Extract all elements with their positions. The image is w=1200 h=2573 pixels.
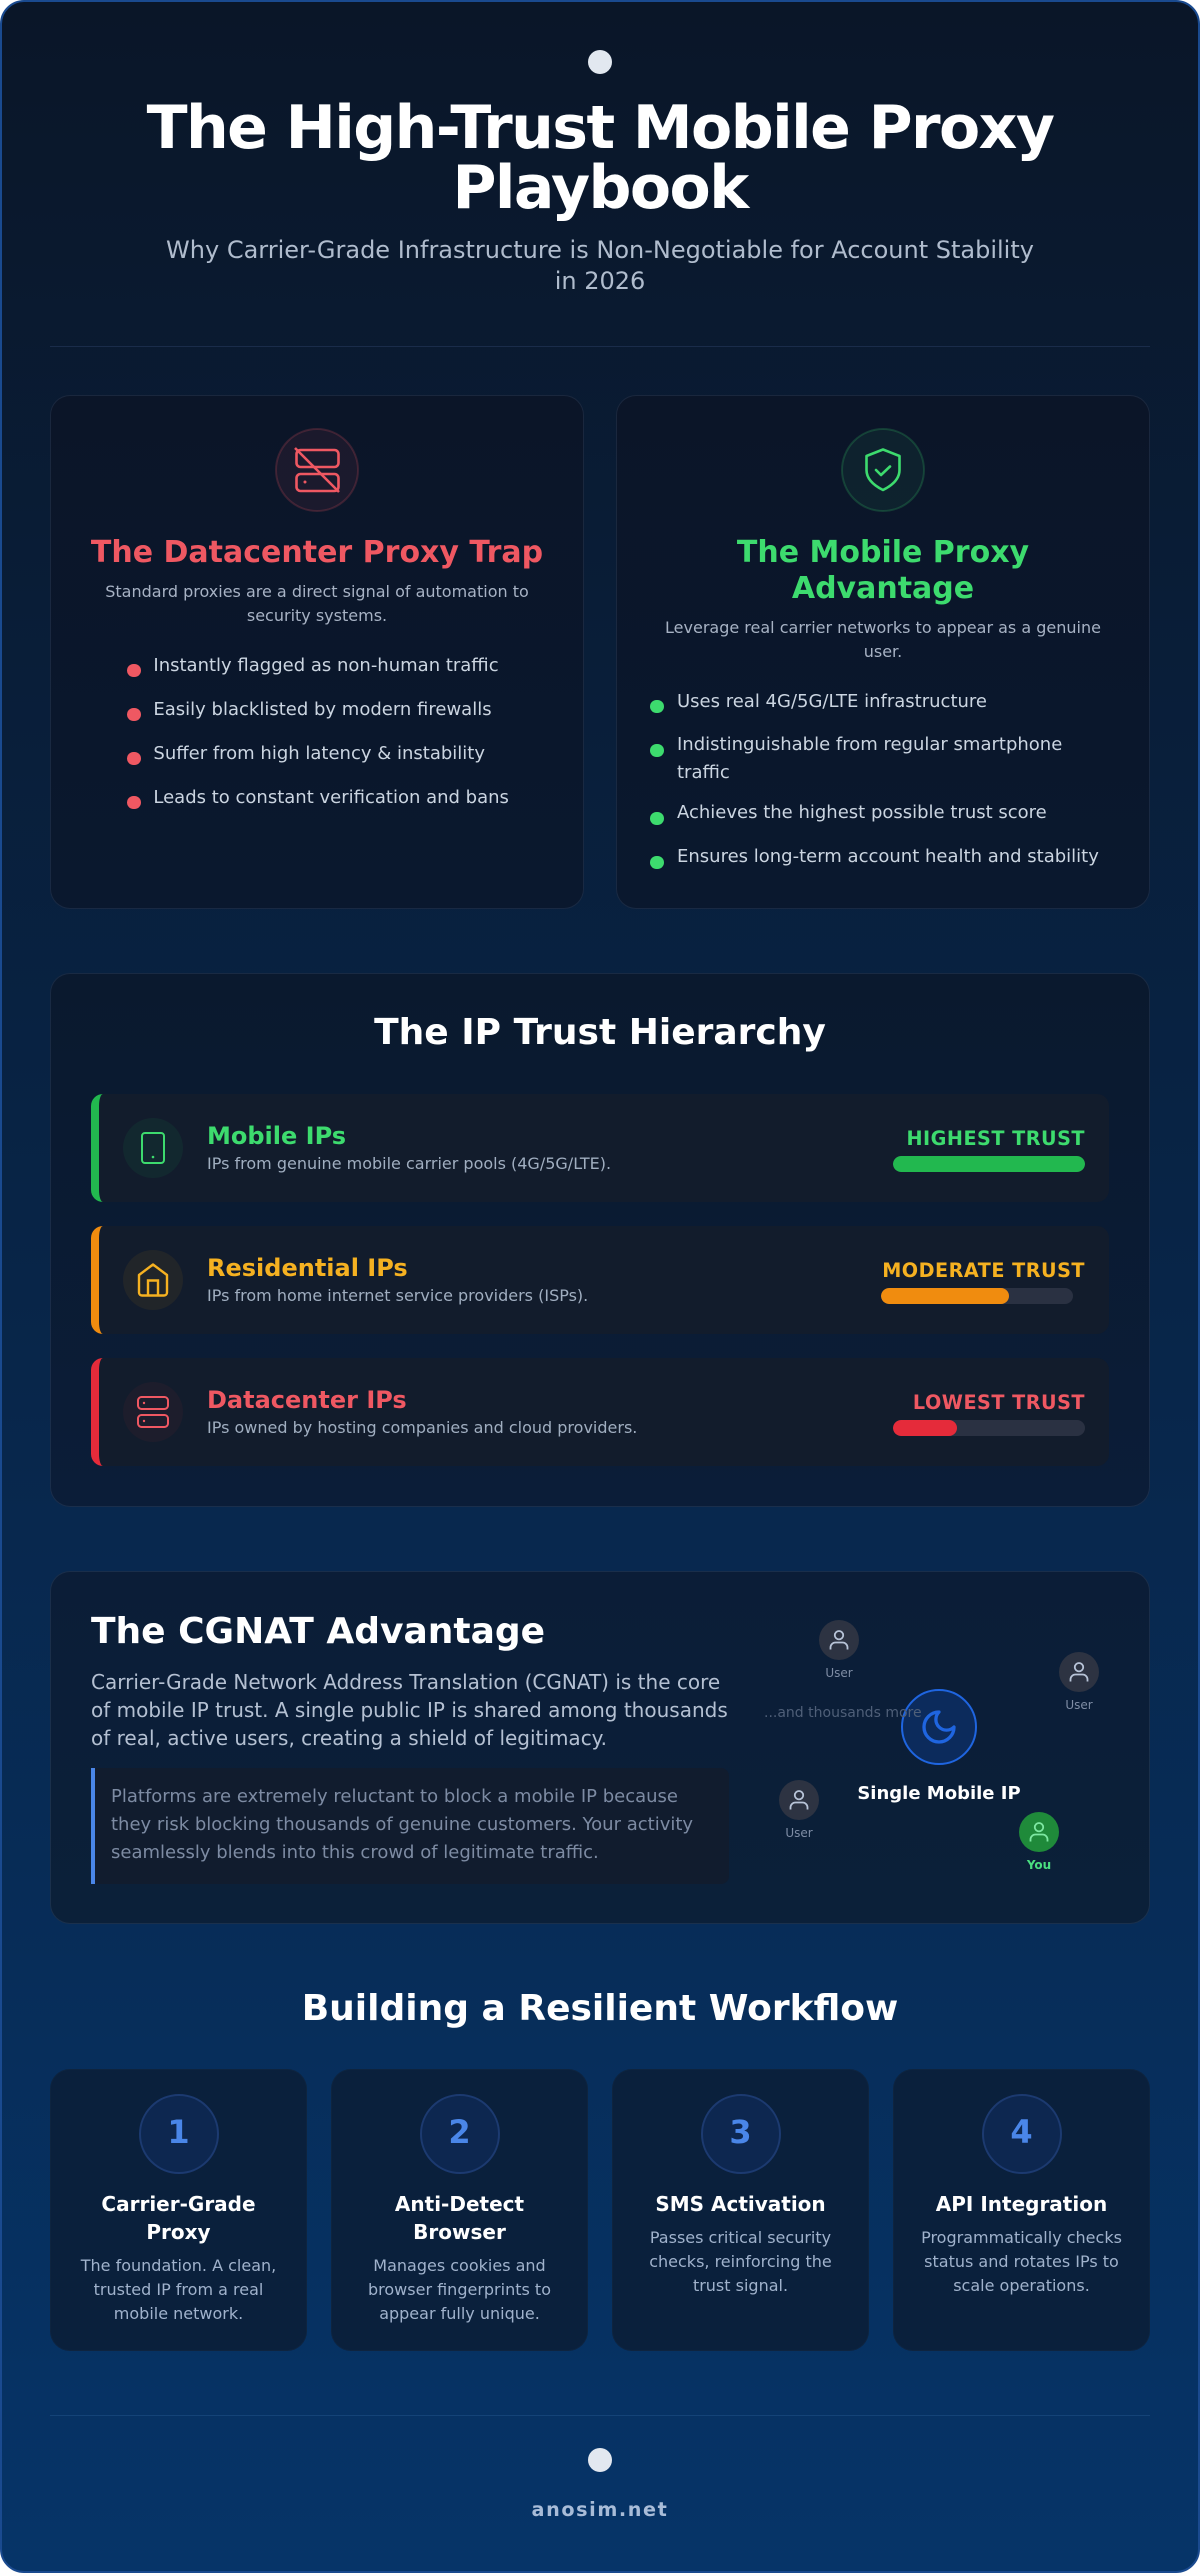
step description: trust signal. — [693, 2276, 788, 2295]
trust bar: two thirds — [881, 1288, 1073, 1304]
step card 3 — [612, 2069, 869, 2351]
user node 1 — [819, 1620, 859, 1680]
tier: datacenter IPs — [91, 1358, 1109, 1466]
label: more users: ...and thousands more — [764, 1705, 922, 1721]
step description: trusted IP from a real — [94, 2280, 263, 2299]
step number 2: 2 — [448, 2113, 471, 2151]
tier name: Datacenter IPs — [207, 1386, 407, 1414]
step number 4: 4 — [1010, 2113, 1033, 2151]
step title — [101, 2192, 256, 2244]
trust label: HIGHEST TRUST — [906, 1127, 1085, 1150]
step title: SMS Activation — [655, 2192, 826, 2216]
step description: appear fully unique. — [379, 2304, 540, 2323]
step description: Programmatically checks — [921, 2228, 1122, 2247]
trust bar: full — [893, 1156, 1085, 1172]
description: mobile: Leverage real carrier networks to appear as a genuine — [665, 618, 1101, 637]
tier description: IPs from genuine mobile carrier pools (4G/5G/LTE). — [207, 1154, 611, 1173]
step description: browser fingerprints to — [368, 2280, 551, 2299]
you node — [1019, 1812, 1059, 1872]
user node 3: User — [785, 1826, 813, 1840]
user node 1: User — [825, 1666, 853, 1680]
step title: Carrier-Grade — [101, 2192, 256, 2216]
panel: datacenter proxy trap — [50, 395, 584, 909]
tier: residential IPs — [91, 1226, 1109, 1334]
step number 3 — [700, 2094, 780, 2174]
heading: mobile: The Mobile Proxy — [737, 535, 1029, 570]
title: Playbook — [452, 153, 748, 223]
user node 2 — [1059, 1652, 1099, 1712]
icon: phone — [123, 1118, 183, 1178]
list: mobile benefits: Indistinguishable from regular smartphone — [677, 734, 1062, 755]
description: datacenter: Standard proxies are a direct signal of automation to — [105, 582, 529, 601]
title: The High-Trust Mobile Proxy — [147, 93, 1053, 163]
step title: Proxy — [146, 2220, 211, 2244]
heading: workflow: Building a Resilient Workflow — [302, 1988, 898, 2029]
icon: moon — [922, 1710, 956, 1744]
step description — [368, 2256, 551, 2323]
description: datacenter: security systems. — [247, 606, 387, 625]
step description — [80, 2256, 276, 2323]
paragraph: CGNAT explanation — [91, 1670, 728, 1750]
list: datacenter drawbacks: Instantly flagged as non-human traffic — [153, 655, 499, 676]
step card 4 — [893, 2069, 1150, 2351]
list: mobile benefits: Ensures long-term account health and stability — [677, 846, 1099, 867]
description: mobile: user. — [864, 642, 902, 661]
icon: crossed-out server — [275, 428, 359, 512]
central IP node — [901, 1689, 977, 1765]
heading: CGNAT: The CGNAT Advantage — [91, 1611, 545, 1652]
paragraph: CGNAT explanation: Carrier-Grade Network Address Translation (CGNAT) is the core — [91, 1670, 720, 1694]
paragraph: CGNAT explanation: of mobile IP trust. A single public IP is shared among thousands — [91, 1698, 728, 1722]
step description — [649, 2228, 832, 2295]
list: datacenter drawbacks — [127, 655, 509, 809]
user node 3 — [779, 1780, 819, 1840]
title — [146, 93, 1054, 223]
label: single mobile IP: Single Mobile IP — [857, 1783, 1021, 1804]
step description — [921, 2228, 1122, 2295]
callout text — [111, 1786, 693, 1863]
subtitle: in 2026 — [555, 267, 645, 295]
callout quote — [91, 1768, 729, 1884]
step number 1: 1 — [167, 2113, 190, 2151]
step description: Manages cookies and — [373, 2256, 546, 2275]
step description: scale operations. — [953, 2276, 1090, 2295]
step card 1 — [50, 2069, 307, 2351]
footer logo dot — [588, 2448, 612, 2472]
callout text: seamlessly blends into this crowd of legitimate traffic. — [111, 1842, 599, 1863]
step number 2 — [420, 2094, 500, 2174]
panel: CGNAT advantage — [50, 1571, 1150, 1924]
list: mobile benefits: Uses real 4G/5G/LTE infrastructure — [677, 691, 987, 712]
trust label: LOWEST TRUST — [913, 1391, 1085, 1414]
step number 4 — [982, 2094, 1062, 2174]
list: datacenter drawbacks: Suffer from high latency & instability — [153, 743, 485, 764]
step description: The foundation. A clean, — [81, 2256, 276, 2275]
description: datacenter — [105, 582, 529, 625]
description: mobile — [665, 618, 1101, 661]
icon: shield check — [841, 428, 925, 512]
tier name: Residential IPs — [207, 1254, 408, 1282]
panel: mobile proxy advantage — [616, 395, 1150, 909]
step title — [395, 2192, 524, 2244]
step description: status and rotates IPs to — [924, 2252, 1119, 2271]
subtitle: Why Carrier-Grade Infrastructure is Non-Negotiable for Account Stability — [166, 236, 1034, 264]
user node 2: User — [1065, 1698, 1093, 1712]
tier description: IPs owned by hosting companies and cloud providers. — [207, 1418, 637, 1437]
you node: You — [1027, 1858, 1051, 1872]
callout text: Platforms are extremely reluctant to block a mobile IP because — [111, 1786, 678, 1807]
trust label: MODERATE TRUST — [882, 1259, 1085, 1282]
step title: Anti-Detect — [395, 2192, 524, 2216]
step number 1 — [138, 2094, 218, 2174]
heading: datacenter: The Datacenter Proxy Trap — [91, 535, 543, 570]
tier description: IPs from home internet service providers (ISPs). — [207, 1286, 588, 1305]
paragraph: CGNAT explanation: of real, active users, creating a shield of legitimacy. — [91, 1726, 607, 1750]
panel: IP trust hierarchy — [50, 973, 1150, 1507]
trust bar: one third — [893, 1420, 1085, 1436]
icon: house — [123, 1250, 183, 1310]
step card 2 — [331, 2069, 588, 2351]
step title: API Integration — [936, 2192, 1107, 2216]
list: mobile benefits: Achieves the highest possible trust score — [677, 802, 1047, 823]
tier: mobile IPs — [91, 1094, 1109, 1202]
list: datacenter drawbacks: Easily blacklisted by modern firewalls — [153, 699, 492, 720]
tier name: Mobile IPs — [207, 1122, 346, 1150]
step description: Passes critical security — [650, 2228, 831, 2247]
subtitle — [166, 236, 1034, 295]
list: datacenter drawbacks: Leads to constant verification and bans — [153, 787, 509, 808]
heading: hierarchy: The IP Trust Hierarchy — [374, 1012, 826, 1053]
list: mobile benefits — [650, 691, 1099, 869]
step number 3: 3 — [729, 2113, 752, 2151]
icon: server — [123, 1382, 183, 1442]
diagram: shared IP — [764, 1620, 1099, 1872]
heading: mobile — [737, 535, 1029, 606]
step title: Browser — [413, 2220, 506, 2244]
heading: mobile: Advantage — [792, 571, 974, 606]
header logo dot — [588, 50, 612, 74]
callout text: they risk blocking thousands of genuine customers. Your activity — [111, 1814, 693, 1835]
step description: mobile network. — [114, 2304, 243, 2323]
list: mobile benefits: traffic — [677, 762, 730, 783]
step description: checks, reinforcing the — [649, 2252, 832, 2271]
footer brand: anosim.net — [532, 2498, 668, 2521]
